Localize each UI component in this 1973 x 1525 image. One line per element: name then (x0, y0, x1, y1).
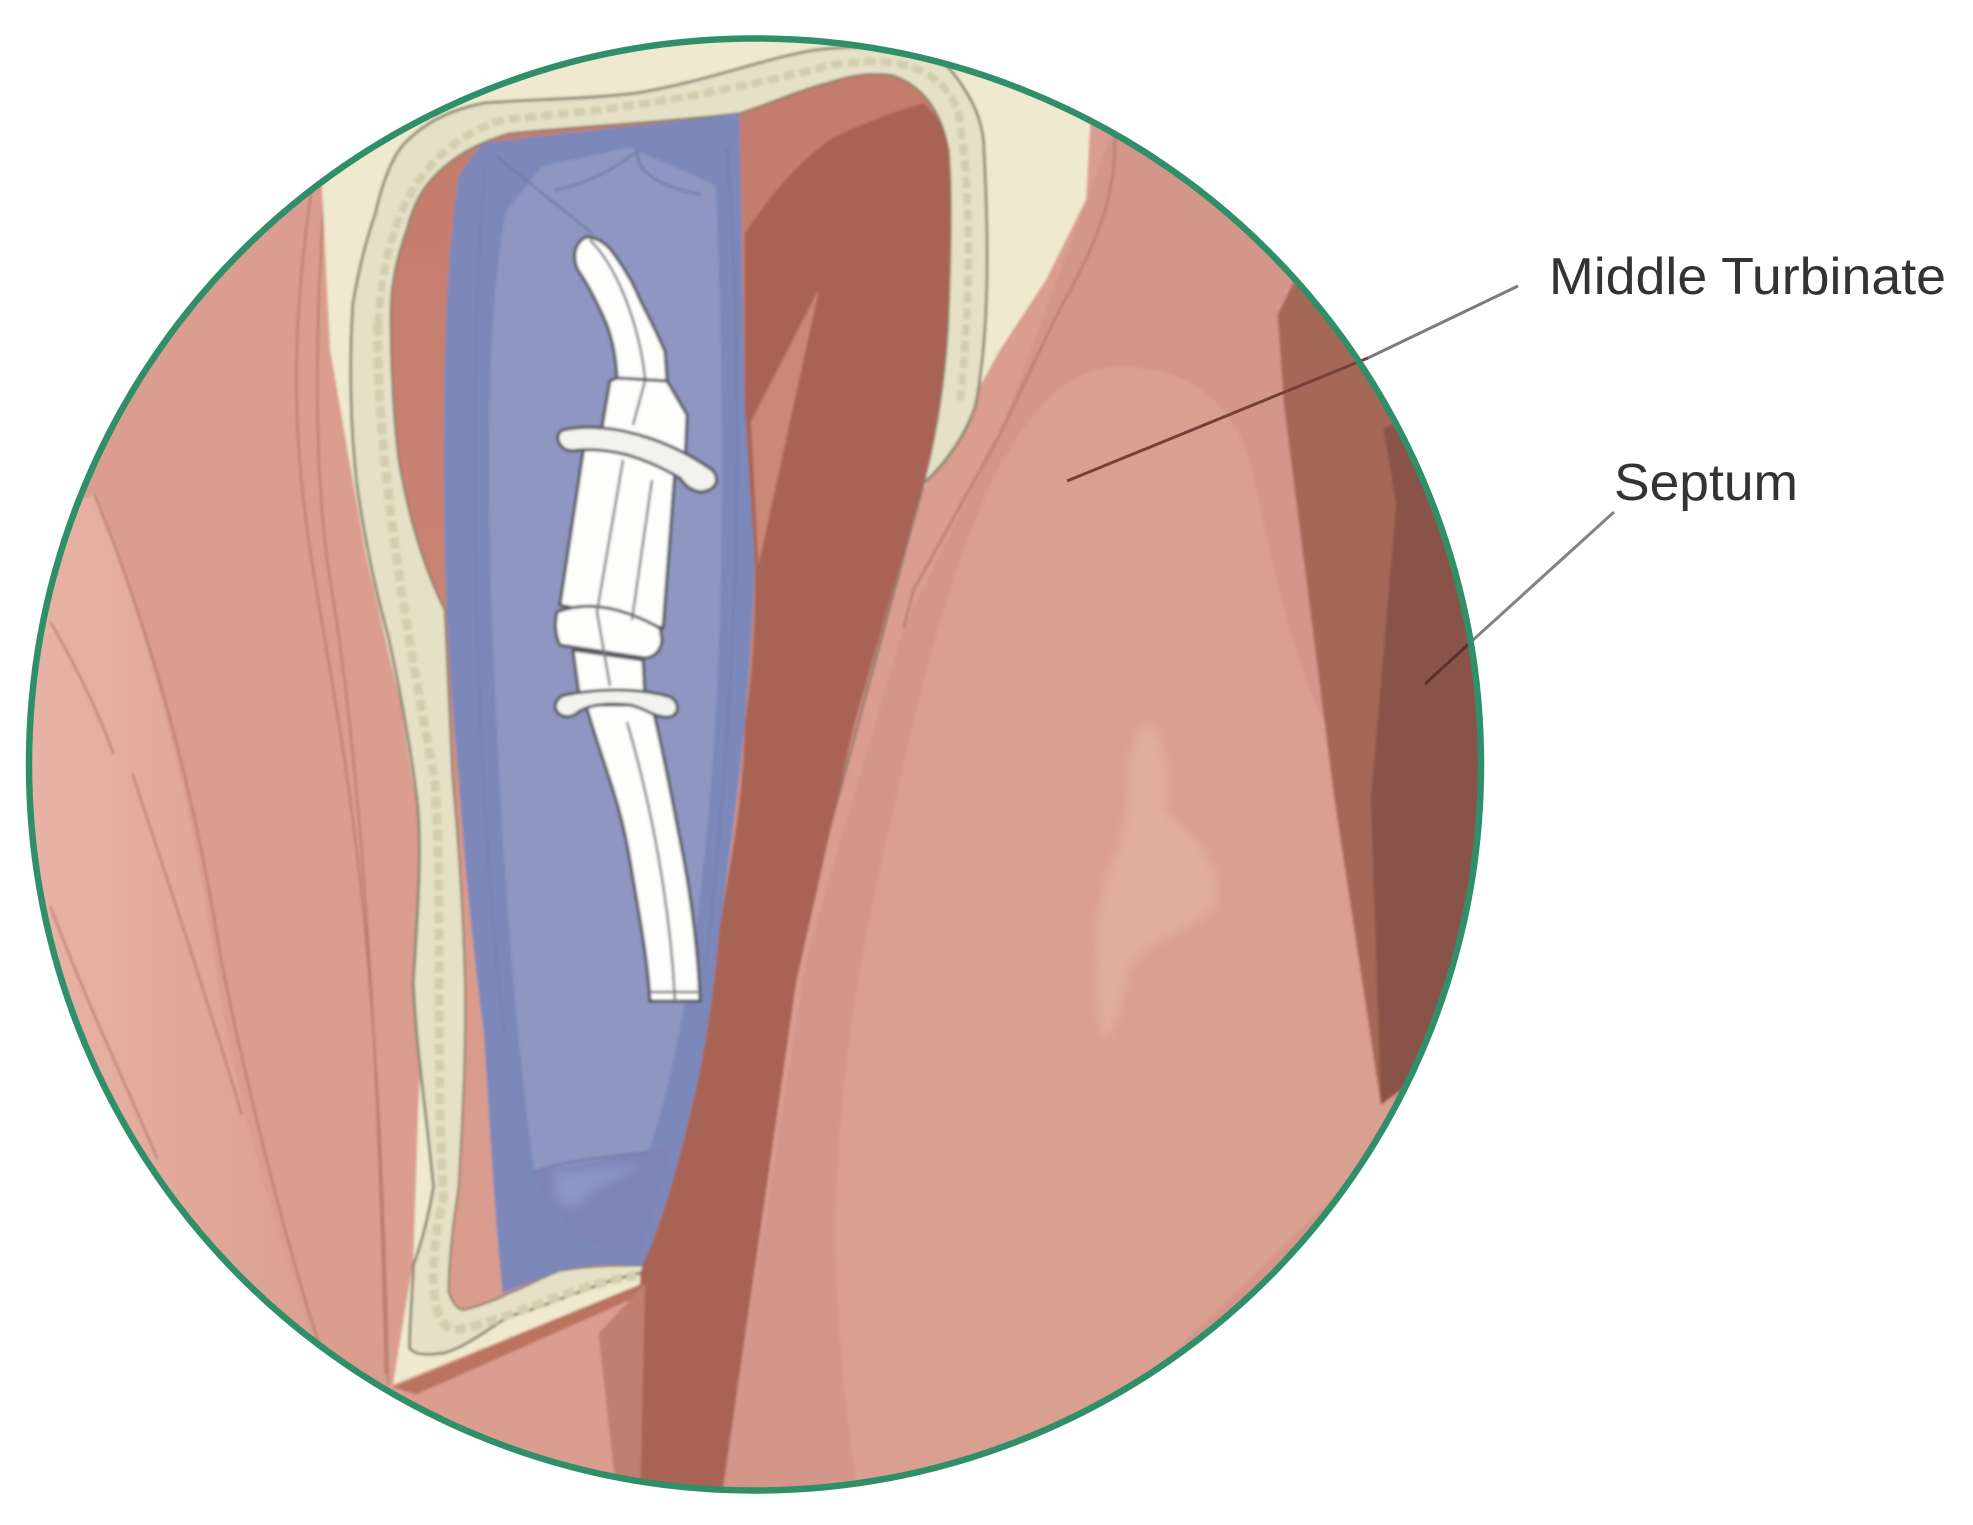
label: Septum: Septum (1614, 454, 1798, 512)
blue packing sponge (444, 113, 755, 1293)
lower ring clip (555, 690, 677, 717)
cream nasal bone surround (320, 42, 1117, 1396)
dark muscle band (598, 103, 951, 1513)
white stent tube device (555, 237, 716, 1001)
central mucosa, middle turbinate (1095, 724, 1219, 1035)
lower collar (556, 606, 662, 658)
leader line: septum inside circle (1425, 640, 1473, 684)
leader line: middle turbinate inside circle (1067, 358, 1368, 481)
main body (560, 440, 675, 628)
leader line: septum (1473, 512, 1614, 640)
inner lines (590, 240, 700, 1001)
left lateral wall (32, 194, 390, 1384)
green circle outline (29, 38, 1481, 1490)
septum shadow bands (1276, 282, 1478, 1106)
sinus cavity (391, 74, 951, 1310)
upper ring clip (558, 427, 716, 492)
bone band (351, 47, 987, 1354)
leader line: middle turbinate (1368, 286, 1518, 358)
upper sleeve (600, 378, 687, 465)
lower neck (573, 650, 645, 700)
circular nasal cavity view (32, 42, 1478, 1488)
upper tube (575, 237, 667, 381)
lower tube (586, 705, 700, 1001)
label: Middle Turbinate: Middle Turbinate (1549, 248, 1946, 306)
